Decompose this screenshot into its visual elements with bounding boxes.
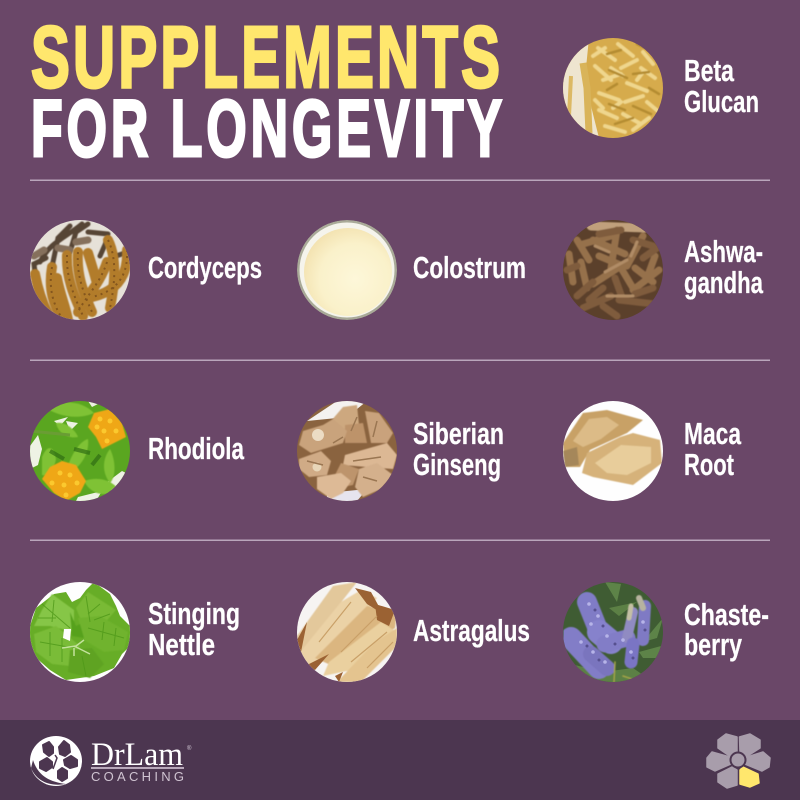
title line: supplements: SUPPLEMENTS <box>31 8 500 106</box>
label: ashwagandha: gandha <box>684 265 764 300</box>
logo mark <box>30 736 82 786</box>
label: chasteberry: berry <box>684 627 743 662</box>
item: beta glucan photo <box>563 38 663 138</box>
item: cordyceps photo <box>30 220 130 320</box>
footer <box>0 720 800 800</box>
item: astragalus photo <box>297 582 397 682</box>
label: rhodiola: Rhodiola <box>148 431 245 466</box>
label: maca root: Root <box>684 447 734 482</box>
label: beta glucan: Glucan <box>684 84 759 119</box>
item: maca root photo <box>563 401 663 501</box>
title <box>31 8 502 174</box>
logo wordmark: DrLam <box>91 737 183 773</box>
label: maca root: Maca <box>684 416 742 451</box>
label: beta glucan: Beta <box>684 53 735 88</box>
item: colostrum photo <box>297 220 397 320</box>
title line: for longevity: FOR LONGEVITY <box>31 83 502 174</box>
label: stinging nettle: Stinging <box>148 596 240 631</box>
label: siberian ginseng: Ginseng <box>413 447 501 482</box>
flower icon <box>707 734 770 788</box>
item: rhodiola photo <box>30 401 130 501</box>
logo wordmark: ® <box>187 745 192 752</box>
label: cordyceps: Cordyceps <box>148 250 262 285</box>
label: chasteberry: Chaste- <box>684 597 769 632</box>
item: ashwagandha photo <box>563 220 663 320</box>
label: stinging nettle: Nettle <box>148 627 215 662</box>
label: siberian ginseng: Siberian <box>413 416 504 451</box>
item: stinging nettle photo <box>28 582 130 682</box>
logo wordmark: COACHING <box>91 769 184 784</box>
label: colostrum: Colostrum <box>413 250 526 285</box>
item: chasteberry photo <box>563 582 663 682</box>
label: ashwagandha: Ashwa- <box>684 234 763 269</box>
label: astragalus: Astragalus <box>413 613 530 648</box>
item: siberian ginseng photo <box>297 401 397 501</box>
